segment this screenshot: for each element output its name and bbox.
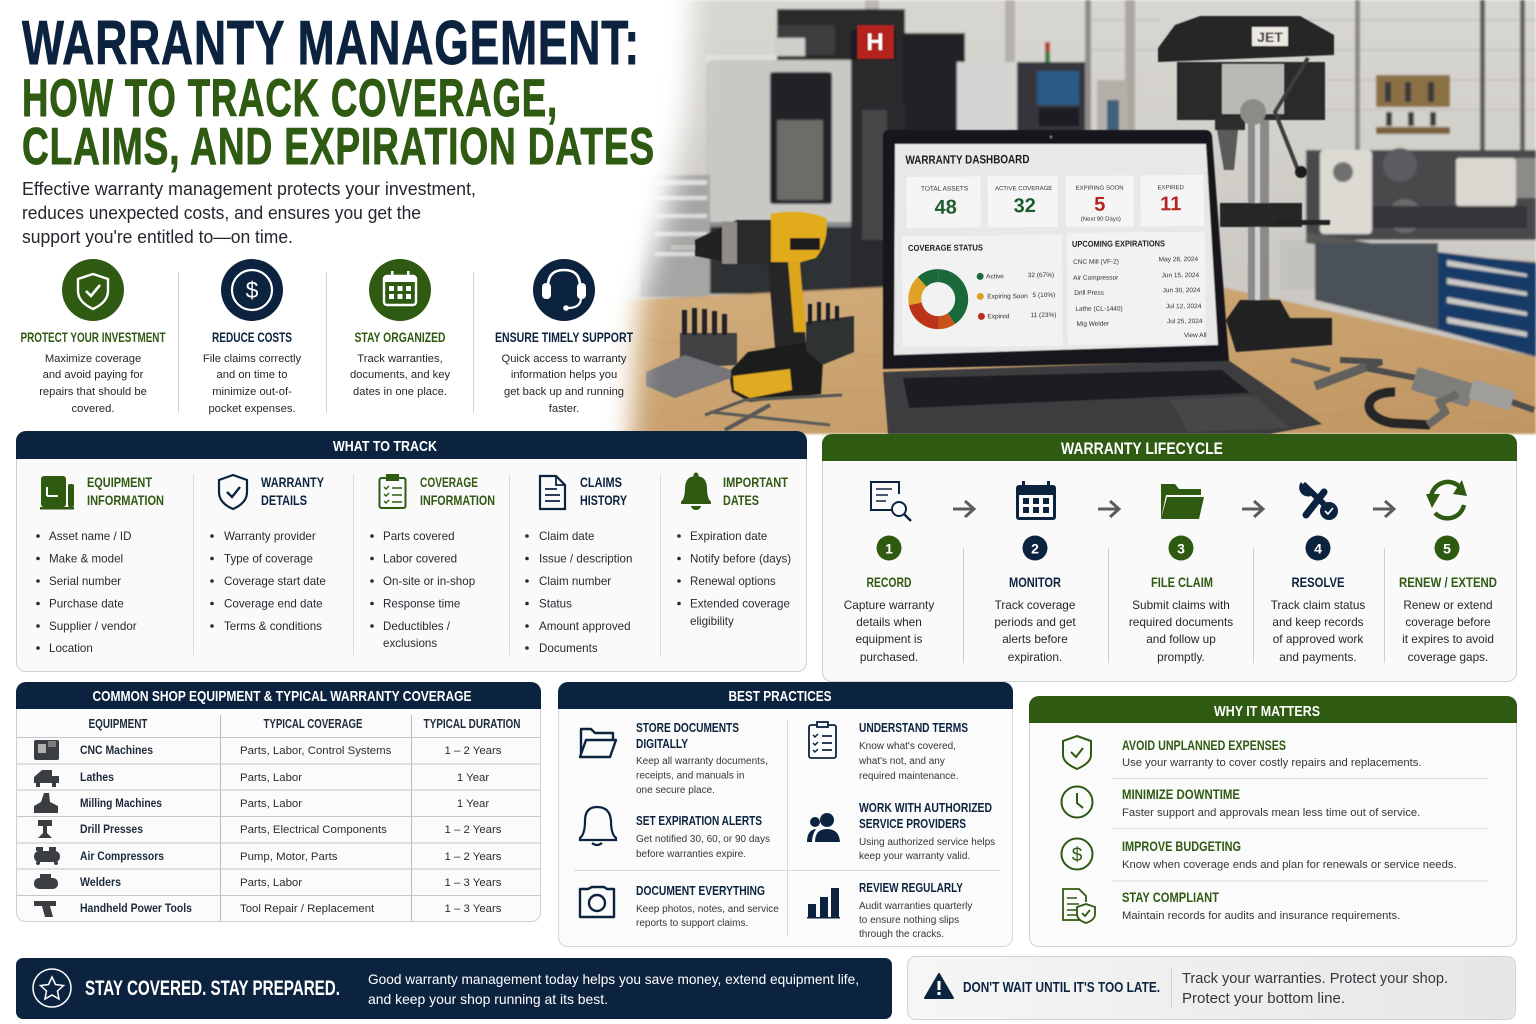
column: equipment information: Purchase date (49, 598, 124, 610)
table rows: equipment names: Milling Machines (80, 798, 162, 810)
table rows: duration: 1 – 3 Years (444, 877, 502, 889)
icon: dollar circle (1062, 838, 1092, 870)
table rows: coverage (240, 745, 392, 915)
practice: document everything: reports to support claims. (636, 918, 748, 929)
panel: equipment table (16, 682, 541, 922)
icon: bit holders (646, 302, 854, 430)
table rows: coverage: Parts, Labor (240, 798, 302, 810)
intro text (22, 179, 476, 247)
panel: equipment table: COMMON SHOP EQUIPMENT & TYPICAL WARRANTY COVERAGE (92, 688, 472, 705)
benefit: reduce costs: minimize out-of- (212, 386, 292, 398)
row icons: equipment silhouettes (34, 740, 60, 917)
step: file claim: Submit claims with (1132, 598, 1230, 612)
benefit: reduce costs: pocket expenses. (208, 403, 296, 415)
practice: store documents digitally: one secure place. (636, 785, 715, 796)
panel: best practices (558, 682, 1013, 946)
step: file claim: promptly. (1157, 650, 1205, 664)
column: claims history: Amount approved (539, 620, 631, 633)
dashboard on laptop screen: EXPIRING SOON (1076, 186, 1124, 192)
step: file claim: 3 (1177, 540, 1185, 556)
column: equipment information: INFORMATION (87, 492, 164, 508)
practice: understand terms: required maintenance. (859, 771, 959, 782)
panel: why it matters (1029, 696, 1517, 946)
arrow (1373, 501, 1394, 517)
dashboard on laptop screen: EXPIRED (1157, 185, 1184, 191)
icon: clock (1062, 786, 1092, 818)
icon: shield check (1063, 736, 1091, 769)
arrow (1098, 501, 1119, 517)
icon: renew arrows (1426, 480, 1467, 518)
icon: document (540, 476, 565, 509)
dashboard on laptop screen: 11 (23%) (1030, 312, 1056, 319)
benefit: reduce costs: and on time to (217, 369, 287, 381)
table rows: duration: 1 Year (457, 772, 489, 784)
column: warranty details: WARRANTY (261, 474, 325, 490)
intro text: Effective warranty management protects your investment, (22, 179, 476, 199)
icon: Haas logo: H (866, 29, 884, 56)
benefit: stay organized: STAY ORGANIZED (354, 329, 446, 345)
column: warranty details: Terms & conditions (224, 620, 322, 633)
step: resolve: and payments. (1279, 650, 1357, 664)
column: equipment information: Supplier / vendor (49, 620, 137, 633)
icon: checklist (809, 722, 836, 758)
column: important dates: Renewal options (690, 575, 776, 588)
column: equipment information: Location (49, 642, 93, 655)
step: record: Capture warranty (844, 598, 934, 612)
column: claims history: CLAIMS (580, 474, 622, 490)
dashboard on laptop screen: Air Compressor (1073, 275, 1119, 282)
practice: review regularly: Audit warranties quarterly (859, 901, 972, 912)
column: important dates: DATES (723, 492, 759, 508)
practice: store documents digitally: receipts, and manuals in (636, 770, 744, 782)
benefit: ensure timely support: get back up and running (504, 386, 624, 398)
dashboard on laptop screen: 32 (67%) (1028, 272, 1054, 279)
dashboard on laptop screen: TOTAL ASSETS (921, 185, 969, 193)
table rows: coverage: Tool Repair / Replacement (240, 903, 375, 915)
column: important dates: IMPORTANT (723, 474, 788, 490)
intro text: reduces unexpected costs, and ensures you get the (22, 203, 421, 223)
panel: why it matters: WHY IT MATTERS (1214, 703, 1320, 720)
banner: stay covered: Good warranty management today helps you save money, extend equipment life, (368, 971, 859, 987)
table rows: coverage: Parts, Electrical Components (240, 824, 387, 836)
step: renew / extend: it expires to avoid (1402, 632, 1494, 646)
column: claims history (525, 474, 632, 655)
dashboard on laptop screen: UPCOMING EXPIRATIONS (1072, 238, 1165, 249)
reason: improve budgeting: IMPROVE BUDGETING (1122, 838, 1241, 854)
step: monitor: alerts before (1002, 632, 1068, 646)
banner: don't wait: DON'T WAIT UNTIL IT'S TOO LATE. (963, 979, 1160, 996)
laptop (883, 130, 1322, 434)
column: important dates: Expiration date (690, 530, 767, 543)
benefit: protect your investment: Maximize coverage (45, 353, 141, 365)
column: warranty details: Coverage start date (224, 575, 326, 588)
icon: Haas logo (857, 25, 894, 59)
table rows: equipment names: Handheld Power Tools (80, 903, 192, 915)
dashboard on laptop screen: Jun 30, 2024 (1163, 287, 1201, 294)
title (22, 9, 655, 176)
practice: document everything: DOCUMENT EVERYTHING (636, 883, 765, 898)
practice: store documents digitally: STORE DOCUMENTS (636, 720, 739, 735)
column: warranty details: Warranty provider (224, 530, 316, 543)
column: coverage information: COVERAGE (420, 474, 478, 490)
panel: best practices: BEST PRACTICES (728, 688, 832, 705)
step: record: 1 (885, 540, 893, 556)
step: record: RECORD (866, 574, 912, 590)
table header (88, 717, 520, 731)
icon: star (33, 969, 71, 1007)
icon: micrometer and caliper (1291, 360, 1534, 425)
step: resolve: and keep records (1272, 615, 1364, 629)
practice: set expiration alerts (580, 807, 770, 860)
photo: workshop scene with laptop, drill and drill press: JET (1257, 29, 1283, 45)
column: claims history: Claim number (539, 575, 611, 588)
column: coverage information: Labor covered (383, 552, 457, 566)
title: WARRANTY MANAGEMENT: (22, 9, 640, 78)
step: monitor: 2 (1031, 540, 1039, 556)
title: HOW TO TRACK COVERAGE, (22, 69, 558, 128)
icon: warning triangle (925, 974, 953, 998)
practice: store documents digitally: Keep all warranty documents, (636, 756, 768, 767)
practice: work with authorized service providers: keep your warranty valid. (859, 851, 970, 862)
step: file claim: required documents (1129, 615, 1233, 629)
dashboard on laptop screen: CNC Mill (VF-2) (1073, 259, 1119, 266)
practice: store documents digitally: DIGITALLY (636, 736, 688, 751)
banner: don't wait: Protect your bottom line. (1182, 990, 1345, 1007)
reason: stay compliant (1063, 889, 1400, 923)
dashboard on laptop screen: Jun 15, 2024 (1162, 272, 1200, 279)
benefit: stay organized: Track warranties, (357, 353, 443, 365)
banner: don't wait (908, 956, 1516, 1020)
practice: document everything (580, 883, 779, 929)
practice: understand terms (809, 720, 968, 782)
dashboard on laptop screen (901, 151, 1207, 347)
practice: review regularly: to ensure nothing slips (859, 915, 959, 926)
column: coverage information: exclusions (383, 637, 437, 650)
column: coverage information: Deductibles / (383, 620, 451, 633)
arrow (953, 501, 974, 517)
icon: clipboard checklist (380, 475, 406, 508)
icon: dollar circle: $ (1072, 845, 1083, 866)
table rows: equipment names: Lathes (80, 772, 114, 784)
column: warranty details: DETAILS (261, 492, 307, 508)
reason: minimize downtime (1062, 786, 1420, 819)
benefit: ensure timely support (495, 259, 633, 415)
practice: understand terms: Know what's covered, (859, 741, 956, 752)
column: important dates: eligibility (690, 615, 734, 628)
step: file claim: FILE CLAIM (1151, 574, 1213, 590)
step: resolve: RESOLVE (1292, 574, 1344, 590)
step: file claim: and follow up (1146, 632, 1216, 646)
table rows: coverage: Pump, Motor, Parts (240, 851, 338, 863)
dashboard on laptop screen: COVERAGE STATUS (908, 242, 983, 253)
dashboard on laptop screen: View All (1184, 332, 1207, 339)
step: record (844, 482, 934, 664)
icon: bell (681, 472, 711, 510)
icon: shield (62, 259, 124, 321)
benefit: stay organized: documents, and key (350, 369, 450, 381)
table rows: coverage: Parts, Labor (240, 877, 302, 889)
step: monitor: MONITOR (1009, 574, 1061, 590)
icon: calendar (1016, 481, 1056, 520)
chart: coverage status donut (915, 276, 962, 323)
table rows: equipment names: CNC Machines (80, 745, 153, 757)
step: monitor: Track coverage (995, 598, 1076, 612)
step: resolve: Track claim status (1271, 598, 1365, 612)
practice: work with authorized service providers (807, 800, 995, 862)
dashboard on laptop screen: 5 (1094, 194, 1105, 216)
table rows: equipment names: Welders (80, 877, 121, 889)
icon: bar chart (807, 888, 840, 918)
column: equipment information (36, 474, 164, 655)
reason: avoid unplanned expenses: AVOID UNPLANNED EXPENSES (1122, 737, 1286, 753)
panel: warranty lifecycle: WARRANTY LIFECYCLE (1061, 439, 1223, 458)
column: claims history: Claim date (539, 530, 594, 543)
dashboard on laptop screen: 11 (1160, 193, 1181, 215)
icon: calendar (369, 259, 431, 321)
practice: work with authorized service providers: WORK WITH AUTHORIZED (859, 800, 992, 815)
icon: document magnifier (871, 482, 911, 521)
dashboard on laptop screen: Mig Welder (1076, 321, 1110, 328)
panel: warranty lifecycle (822, 434, 1517, 682)
step: monitor: expiration. (1008, 650, 1062, 664)
column: coverage information: On-site or in-shop (383, 575, 475, 588)
column: warranty details (210, 474, 326, 633)
title: CLAIMS, AND EXPIRATION DATES (22, 118, 655, 176)
column: claims history: Documents (539, 642, 598, 655)
table rows: duration: 1 Year (457, 798, 489, 810)
reason: improve budgeting: Know when coverage ends and plan for renewals or service needs. (1122, 859, 1457, 871)
benefit: ensure timely support: information helps you (511, 369, 617, 381)
benefit: protect your investment: PROTECT YOUR INVESTMENT (20, 329, 166, 345)
benefit: ensure timely support: ENSURE TIMELY SUPPORT (495, 329, 633, 345)
table rows: coverage: Parts, Labor (240, 772, 302, 784)
benefit: protect your investment: covered. (72, 403, 114, 415)
table rows: duration: 1 – 2 Years (444, 745, 502, 757)
dashboard on laptop screen: Jul 12, 2024 (1166, 303, 1202, 310)
practice: document everything: Keep photos, notes, and service (636, 904, 779, 915)
practice: understand terms: UNDERSTAND TERMS (859, 720, 968, 735)
icon: shield check (219, 475, 247, 509)
practice: understand terms: what's not, and any (858, 756, 945, 767)
step: renew / extend: coverage before (1405, 615, 1491, 629)
practice: set expiration alerts: SET EXPIRATION ALERTS (636, 813, 762, 828)
column: claims history: Status (539, 598, 572, 610)
dashboard on laptop screen: ACTIVE COVERAGE (995, 186, 1052, 192)
intro text: support you're entitled to—on time. (22, 227, 293, 247)
dashboard on laptop screen: Expiring Soon (987, 293, 1028, 300)
arrow (1242, 501, 1263, 517)
step: resolve (1271, 482, 1365, 664)
step: renew / extend: 5 (1443, 540, 1451, 556)
icon: headset (533, 259, 595, 321)
benefit: protect your investment: repairs that should be (39, 386, 147, 398)
column: important dates: Extended coverage (690, 598, 790, 610)
dashboard on laptop screen: WARRANTY DASHBOARD (905, 152, 1030, 167)
banner: stay covered (16, 958, 892, 1019)
icon: dollar: $ (246, 277, 259, 303)
reason: stay compliant: Maintain records for audits and insurance requirements. (1122, 910, 1400, 922)
step: renew / extend: RENEW / EXTEND (1399, 574, 1497, 590)
practice: work with authorized service providers: Using authorized service helps (859, 837, 995, 848)
icon: folder outline (580, 729, 616, 757)
icon: dollar (221, 259, 283, 321)
benefit: reduce costs: File claims correctly (203, 353, 302, 365)
benefit: ensure timely support: faster. (549, 403, 579, 415)
column: equipment information: EQUIPMENT (87, 474, 152, 490)
reason: minimize downtime: Faster support and approvals mean less time out of service. (1122, 807, 1420, 819)
dashboard on laptop screen: Expired (987, 313, 1010, 320)
column: important dates: Notify before (days) (690, 552, 791, 566)
icon: machine (40, 476, 74, 510)
reason: stay compliant: STAY COMPLIANT (1122, 889, 1219, 905)
reason: improve budgeting (1062, 838, 1457, 871)
table rows: duration: 1 – 3 Years (444, 903, 502, 915)
step: renew / extend: coverage gaps. (1408, 650, 1488, 664)
panel: what to track (16, 431, 807, 672)
column: claims history: HISTORY (580, 492, 627, 508)
icon: folder (1161, 484, 1204, 519)
banner: don't wait: Track your warranties. Protect your shop. (1182, 970, 1448, 987)
column: coverage information: Response time (383, 598, 460, 610)
table header: EQUIPMENT (88, 717, 148, 731)
icon: document shield (1063, 889, 1095, 923)
dashboard on laptop screen: Jul 25, 2024 (1167, 318, 1203, 325)
step: resolve: of approved work (1273, 632, 1363, 646)
step: monitor: periods and get (994, 615, 1076, 629)
table rows: equipment names: Air Compressors (80, 851, 164, 863)
reason: minimize downtime: MINIMIZE DOWNTIME (1122, 786, 1240, 802)
table rows: coverage: Parts, Labor, Control Systems (240, 745, 392, 757)
column: warranty details: Coverage end date (224, 598, 323, 610)
dashboard on laptop screen: (Next 90 Days) (1081, 217, 1121, 223)
step: monitor (994, 481, 1076, 664)
dashboard on laptop screen: Active (986, 273, 1004, 280)
column: claims history: Issue / description (539, 552, 632, 566)
dashboard on laptop screen: 5 (10%) (1032, 292, 1055, 299)
practice: store documents digitally (580, 720, 768, 796)
practice: review regularly (807, 880, 972, 940)
step: record: details when (856, 615, 922, 629)
step: record: equipment is (856, 632, 923, 646)
practice: set expiration alerts: before warranties expire. (636, 849, 746, 860)
dashboard on laptop screen: 32 (1014, 195, 1036, 217)
table rows: equipment names (80, 745, 192, 915)
table header: TYPICAL DURATION (424, 717, 520, 731)
benefit: ensure timely support: Quick access to warranty (502, 353, 627, 365)
column: warranty details: Type of coverage (224, 552, 313, 566)
dashboard on laptop screen: May 28, 2024 (1159, 256, 1198, 263)
practice: work with authorized service providers: SERVICE PROVIDERS (859, 816, 966, 831)
table header: TYPICAL COVERAGE (264, 717, 362, 731)
panel: what to track: WHAT TO TRACK (333, 438, 437, 455)
icon: people (807, 813, 840, 842)
dashboard on laptop screen: 48 (935, 197, 957, 219)
column: equipment information: Make & model (49, 552, 123, 566)
practice: review regularly: through the cracks. (859, 929, 944, 940)
photo: workshop scene with laptop, drill and drill press (0, 0, 1536, 480)
benefit: stay organized: dates in one place. (353, 386, 447, 398)
column: equipment information: Asset name / ID (49, 530, 131, 543)
banner: stay covered: STAY COVERED. STAY PREPARED. (85, 977, 340, 1000)
dashboard on laptop screen: Drill Press (1074, 290, 1105, 297)
icon: bell outline (580, 807, 616, 845)
benefit: protect your investment: and avoid paying for (43, 369, 144, 381)
benefit: reduce costs: REDUCE COSTS (212, 329, 292, 345)
column: coverage information (370, 474, 495, 650)
banner: stay covered: and keep your shop running at its best. (368, 991, 608, 1007)
column: equipment information: Serial number (49, 575, 121, 588)
practice: set expiration alerts: Get notified 30, 60, or 90 days (636, 834, 770, 845)
step: resolve: 4 (1314, 540, 1322, 556)
practice: review regularly: REVIEW REGULARLY (859, 880, 963, 895)
step: renew / extend: Renew or extend (1403, 598, 1493, 612)
column: coverage information: INFORMATION (420, 492, 495, 508)
icon: cordless drill (671, 212, 827, 402)
benefit: protect your investment (20, 259, 166, 415)
reason: avoid unplanned expenses (1063, 736, 1422, 769)
dashboard on laptop screen: Lathe (CL-1440) (1075, 306, 1123, 313)
reason: avoid unplanned expenses: Use your warranty to cover costly repairs and replacements. (1122, 757, 1422, 769)
benefit: stay organized (350, 259, 450, 398)
icon: camera (580, 887, 614, 917)
table rows: duration: 1 – 2 Years (444, 824, 502, 836)
step: record: purchased. (860, 650, 918, 664)
benefit: reduce costs (203, 259, 302, 415)
column: coverage information: Parts covered (383, 530, 455, 543)
table rows: duration: 1 – 2 Years (444, 851, 502, 863)
step: file claim (1129, 484, 1233, 664)
column: important dates (677, 472, 791, 628)
table rows: equipment names: Drill Presses (80, 824, 143, 836)
icon: wrench and check (1299, 482, 1338, 520)
step: renew / extend (1399, 480, 1497, 664)
table rows: duration (444, 745, 502, 915)
